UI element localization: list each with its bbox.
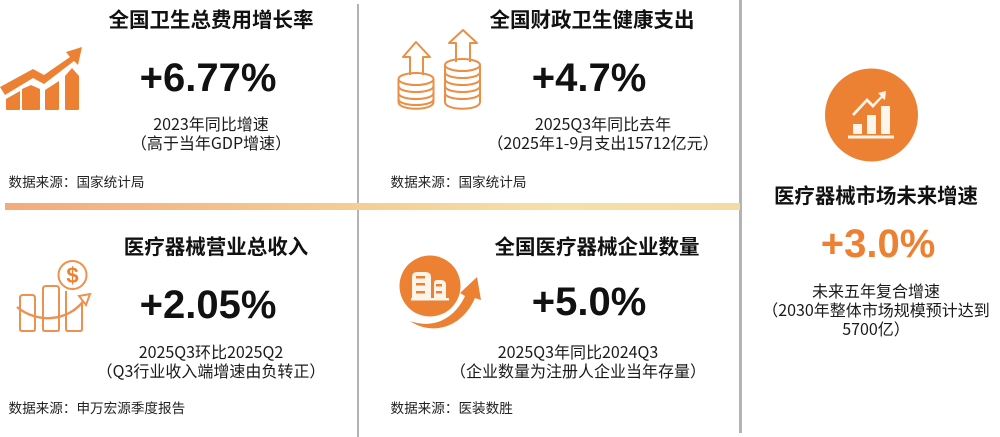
vertical divider: right	[739, 0, 742, 433]
dollar sign: $	[66, 263, 79, 288]
description: （2025年1-9月支出15712亿元）	[487, 130, 719, 154]
description	[450, 339, 706, 382]
panel: total health expenditure growth	[0, 9, 314, 190]
icon: bars, coin and curved arrow	[16, 260, 92, 332]
data source: 数据来源：国家统计局	[8, 175, 144, 190]
description	[487, 111, 719, 154]
panel: future market growth	[762, 68, 990, 340]
icon: orange circle with bars and arrow	[825, 68, 918, 162]
description: 2025Q3年同比去年	[535, 111, 671, 135]
description: 2023年同比增速	[153, 111, 269, 135]
horizontal gradient divider	[5, 203, 740, 210]
panel: fiscal health spending	[390, 9, 719, 190]
heading: fiscal health spending: 全国财政卫生健康支出	[490, 9, 694, 32]
description: （高于当年GDP增速）	[131, 130, 291, 154]
vertical divider: left	[356, 4, 359, 437]
icon: rising bars with arrow	[0, 47, 82, 110]
value: +2.05%: +2.05%	[140, 283, 276, 327]
heading: number of companies: 全国医疗器械企业数量	[494, 236, 700, 259]
description	[131, 111, 291, 154]
heading: future growth: 医疗器械市场未来增速	[774, 186, 978, 208]
description: 未来五年复合增速	[812, 278, 940, 302]
data source: 数据来源：申万宏源季度报告	[8, 401, 185, 416]
value: +5.0%: +5.0%	[532, 280, 646, 324]
data source: 数据来源：国家统计局	[390, 175, 526, 190]
icon: building in circle with swoosh arrow	[400, 256, 481, 328]
description	[762, 278, 990, 340]
data source: 数据来源：医装数胜	[390, 401, 513, 416]
value: +6.77%: +6.77%	[140, 56, 276, 100]
panel: device operating revenue	[8, 236, 325, 416]
value: +4.7%: +4.7%	[532, 56, 646, 100]
icon: coin stacks with up arrows	[398, 29, 481, 110]
heading: total health expenditure: 全国卫生总费用增长率	[108, 9, 314, 32]
description	[97, 339, 325, 382]
description: （Q3行业收入端增速由负转正）	[97, 358, 325, 382]
description: （企业数量为注册人企业当年存量）	[450, 358, 706, 382]
description: （2030年整体市场规模预计达到	[762, 297, 990, 321]
description: 5700亿）	[842, 316, 910, 340]
value: +3.0%: +3.0%	[821, 222, 935, 266]
heading: device revenue: 医疗器械营业总收入	[124, 236, 308, 259]
description: 2025Q3年同比2024Q3	[498, 339, 658, 363]
description: 2025Q3环比2025Q2	[139, 339, 283, 363]
panel: number of device companies	[390, 236, 706, 416]
